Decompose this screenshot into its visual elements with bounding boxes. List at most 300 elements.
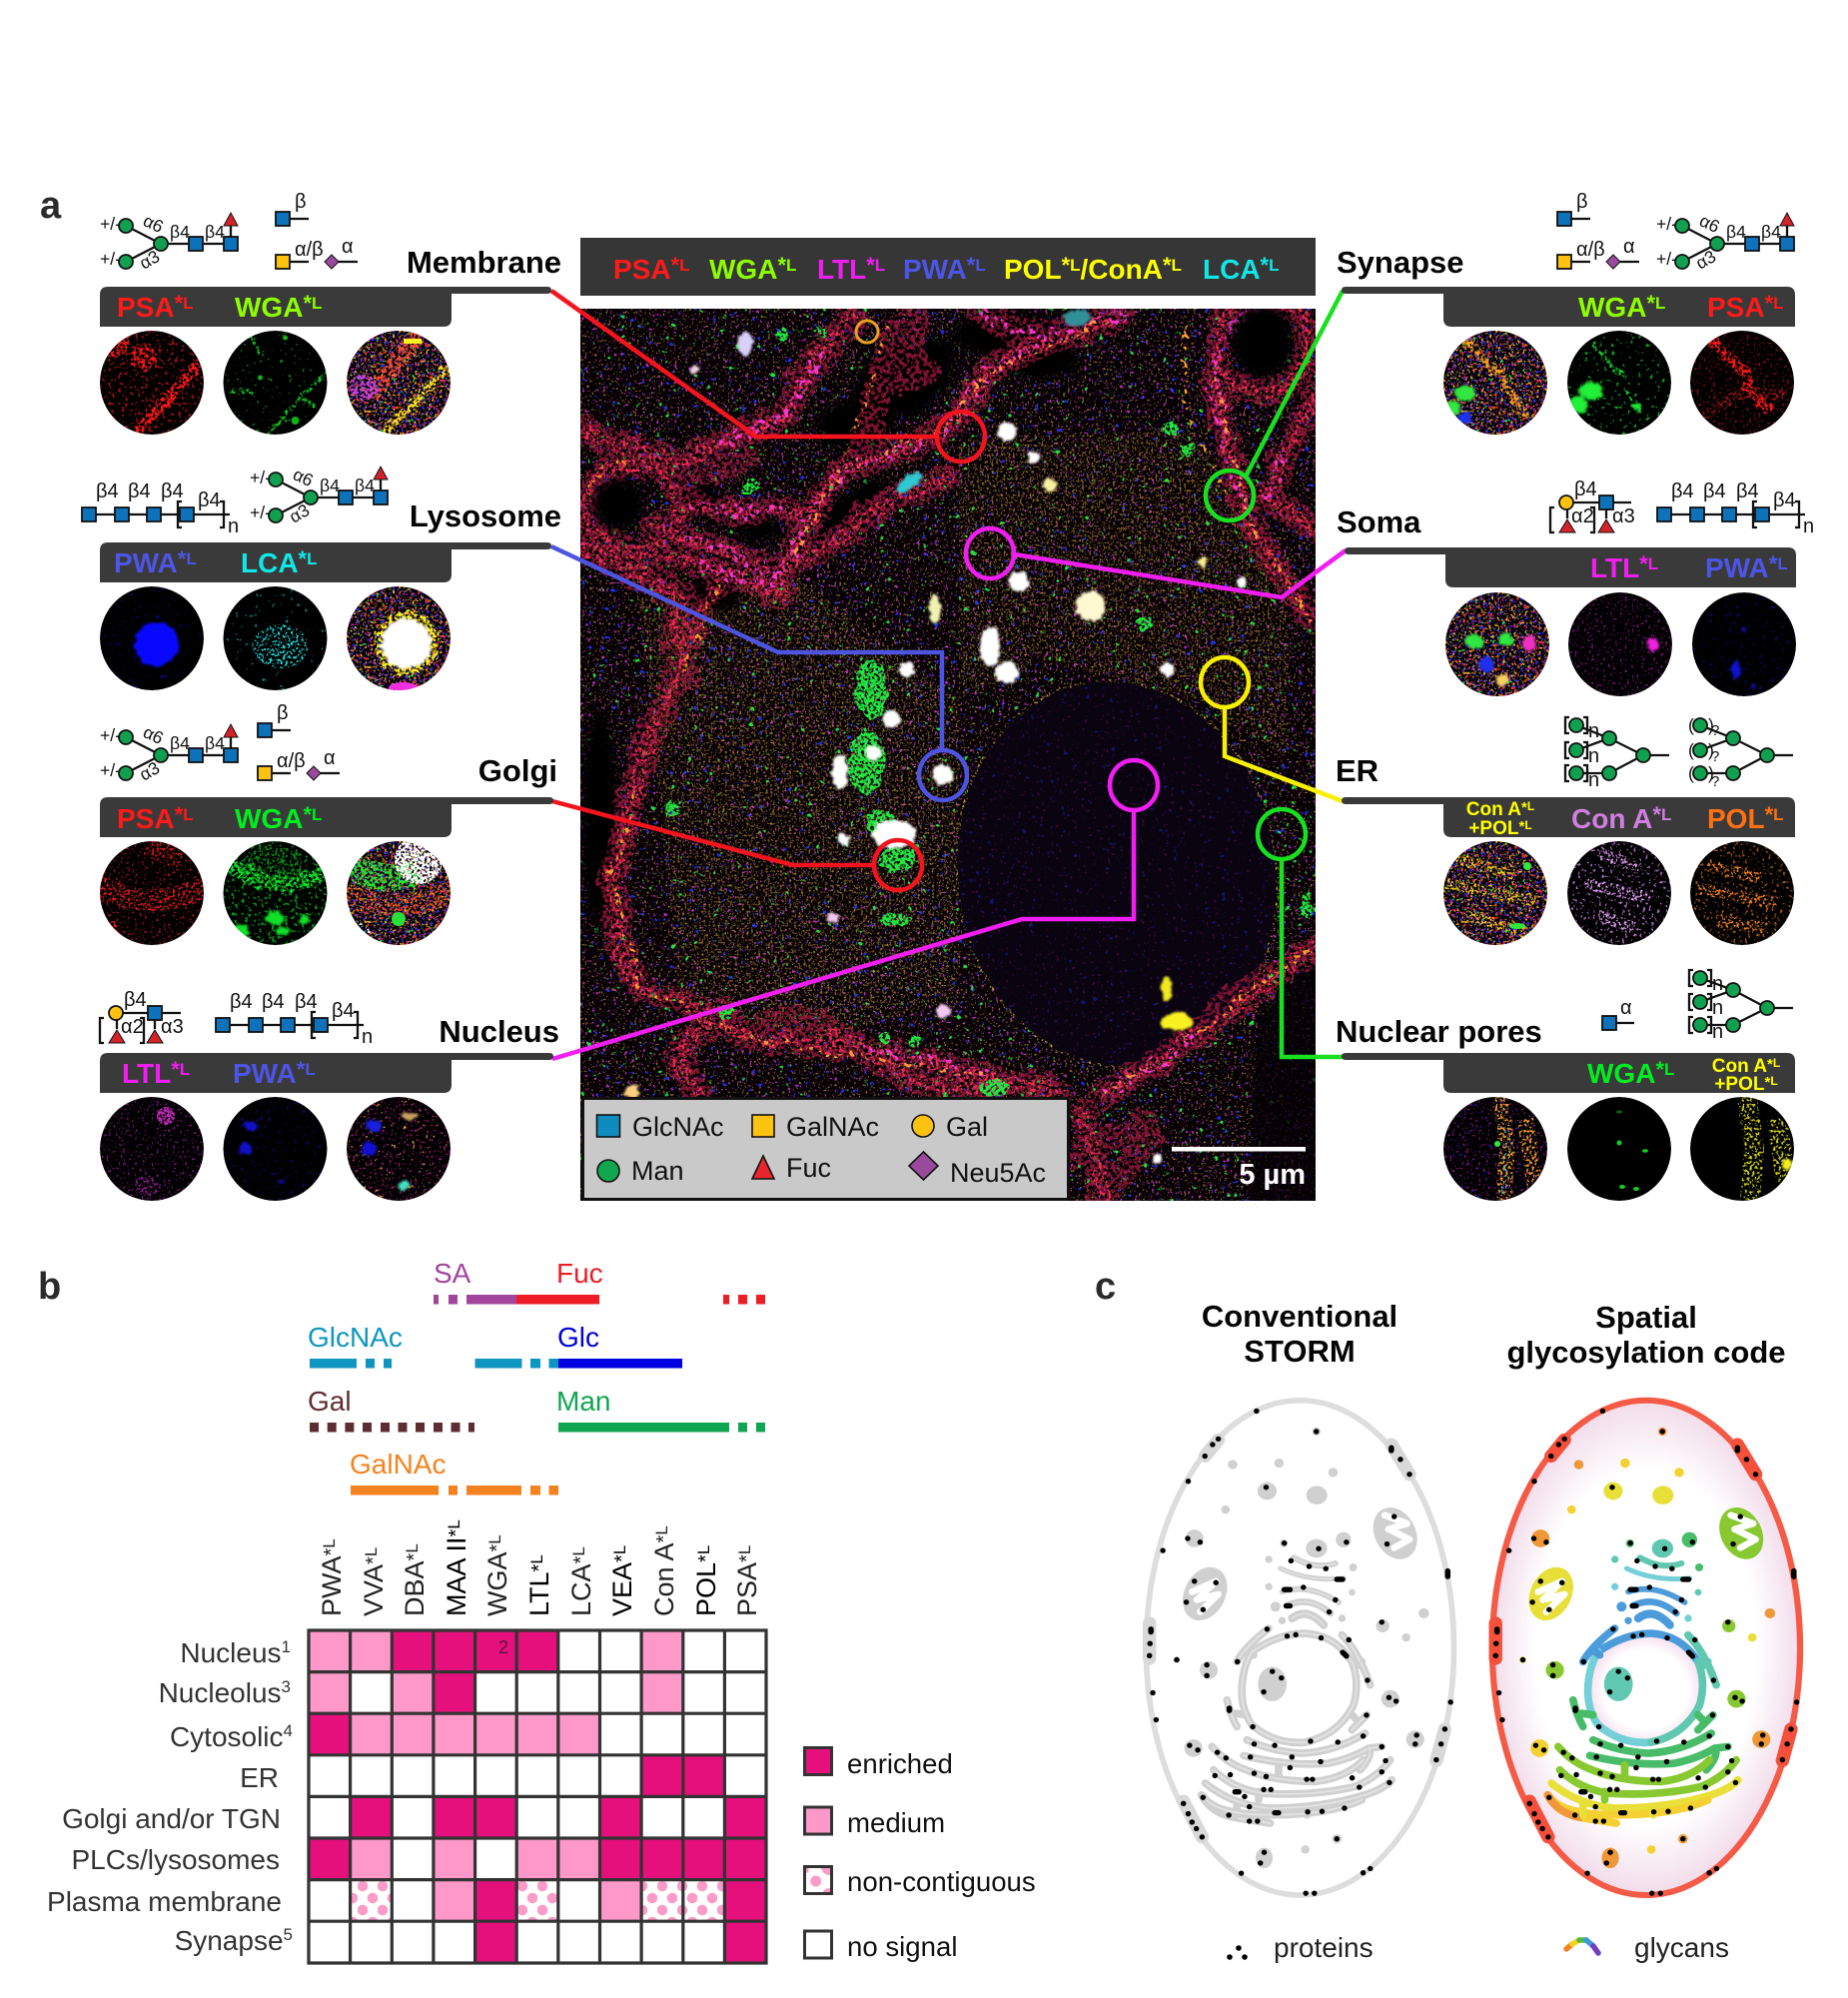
column headers: *: [653, 1534, 675, 1542]
row labels: Plasma membrane: [47, 1886, 282, 1917]
label banner: L: [183, 805, 194, 824]
channel title band: *: [1261, 253, 1270, 278]
column headers: *: [611, 1554, 633, 1562]
channel title band: PSA: [613, 254, 671, 285]
SA and Fuc: Fuc: [556, 1258, 603, 1289]
channel title band: *: [967, 253, 976, 278]
glycan: terminal residues: [1557, 191, 1639, 269]
column headers: *: [363, 1556, 385, 1564]
leader: ER: [1201, 657, 1343, 801]
channel title band: *: [671, 253, 680, 278]
label banner: L: [1655, 294, 1665, 313]
image: WGA: [224, 331, 330, 438]
column headers: *: [486, 1544, 508, 1552]
glycan: fucosylated: [1550, 479, 1635, 532]
label banner: *: [1765, 291, 1774, 316]
glycan: high mannose optional: ): [1708, 740, 1714, 760]
label banner: PWA: [1705, 552, 1769, 583]
glycan: polymer: n: [362, 1026, 373, 1048]
region: Membrane: [100, 191, 561, 439]
label banner: Con A: [1712, 1056, 1767, 1077]
glycan: branched: β4: [1761, 222, 1781, 242]
glycan: fucosylated: α2: [1571, 505, 1594, 527]
glycan: branched: β4: [170, 733, 190, 753]
dark lumen areas: [581, 313, 1079, 929]
Gal and Man: Gal: [308, 1386, 352, 1417]
label banner: WGA: [235, 803, 303, 834]
image: LTL: [100, 1097, 204, 1201]
channel title band: [580, 238, 1316, 296]
glycan: branched: α3: [286, 500, 313, 526]
image: WGA: [1567, 331, 1671, 435]
glycan symbol legend: Gal: [946, 1112, 988, 1142]
glycan: alpha GlcNAc: [1602, 997, 1634, 1030]
heat map: 2: [498, 1637, 508, 1657]
glycan: high mannose n: n: [1588, 769, 1599, 791]
region: Nucleus: [100, 989, 559, 1201]
image: PSA: [100, 331, 206, 439]
channel title band: L: [875, 256, 885, 275]
glycan: polymer: β4: [161, 481, 184, 502]
glycan: high mannose n: n: [1588, 745, 1599, 767]
image: PWA: [224, 1097, 328, 1201]
column headers: LCA: [566, 1563, 596, 1616]
column headers: L: [610, 1545, 629, 1554]
label banner: *: [303, 802, 312, 827]
glycan symbol legend: Neu5Ac: [950, 1158, 1046, 1188]
heat map legend: non-contiguous: [847, 1866, 1036, 1897]
row labels: Cytosolic: [170, 1721, 284, 1752]
glycan: fucosylated: β4: [124, 989, 147, 1011]
glycan: branched: β4: [320, 476, 340, 496]
glycan: high mannose optional: [1688, 715, 1793, 790]
column headers: L: [445, 1519, 463, 1529]
glycan: branched: β4: [355, 476, 375, 496]
label banner: *: [171, 1057, 180, 1082]
label banner: PSA: [117, 803, 175, 834]
row labels: ER: [240, 1762, 279, 1793]
glycan: branched: +/-: [250, 502, 271, 522]
label banner: *: [1521, 799, 1527, 816]
label banner: L: [1648, 554, 1658, 573]
GalNAc: GalNAc: [350, 1449, 446, 1480]
key: glycans: glycans: [1634, 1932, 1729, 1963]
row labels: Golgi and/or TGN: [62, 1803, 281, 1834]
column headers: *: [570, 1555, 592, 1563]
heading Soma: Soma: [1337, 504, 1421, 539]
column headers: L: [569, 1546, 588, 1556]
heading Lysosome: Lysosome: [410, 499, 561, 533]
glycan: fucosylated: [100, 989, 184, 1043]
column headers: [317, 1519, 762, 1616]
image: merge: [1445, 592, 1549, 696]
glycan: terminal residues: α/β: [277, 750, 306, 772]
column headers: PWA: [317, 1556, 347, 1616]
glycan: polymer: β4: [1736, 481, 1759, 502]
glycan: polymer: n: [1803, 515, 1814, 537]
channel title band: LCA: [1203, 254, 1261, 285]
channel title band: L: [786, 256, 796, 275]
glycan: terminal residues: α: [324, 747, 336, 769]
glycan: branched: β4: [205, 733, 225, 753]
glycan: branched: +/-: [1656, 249, 1677, 269]
title: Spatial glycosylation code: Spatial: [1595, 1300, 1697, 1335]
glycan: high mannose n: [1689, 970, 1793, 1043]
row labels: Nucleus: [180, 1637, 282, 1668]
label banner: PSA: [1707, 292, 1765, 323]
label banner: L: [180, 1060, 190, 1079]
region: Soma: [1337, 479, 1814, 696]
image: WGA: [1567, 1097, 1671, 1201]
main micrograph: [580, 297, 1316, 1201]
glycan: polymer: β4: [230, 991, 253, 1013]
heading Synapse: Synapse: [1337, 245, 1464, 280]
glycan structure: branched: +/-: [100, 249, 121, 269]
channel title band: *: [866, 253, 875, 278]
green puncta: [665, 328, 1312, 1095]
column headers: LTL: [524, 1571, 554, 1616]
column headers: MAA II: [442, 1536, 471, 1616]
SA and Fuc: [434, 1258, 765, 1305]
image: WGA: [224, 841, 328, 945]
label banner: L: [1777, 554, 1788, 573]
label banner: +POL: [1468, 818, 1518, 839]
label banner: *: [175, 291, 184, 316]
spatial glycosylation code cell: [1492, 1401, 1800, 1895]
glycan: high mannose optional: (: [1688, 715, 1694, 735]
glycan structure: branched: α6: [140, 210, 167, 237]
label banner: PSA: [117, 292, 175, 323]
leader: lysosome: [551, 546, 967, 800]
glycan: fucosylated: α3: [161, 1016, 184, 1038]
glycan: terminal residues: α: [1623, 236, 1635, 258]
glycan structure: terminal residues: α/β: [295, 239, 324, 261]
title: Spatial glycosylation code: glycosylation code: [1506, 1335, 1786, 1370]
region: Synapse: [1337, 191, 1795, 435]
glycan structure: branched: β4: [205, 222, 225, 242]
glycan structure: branched: [100, 210, 238, 273]
heat map legend: no signal: [847, 1931, 957, 1962]
column headers: L: [527, 1554, 546, 1564]
label banner: L: [1661, 805, 1671, 824]
glycan structure: branched: α3: [136, 246, 163, 273]
glycan symbol legend: Fuc: [786, 1153, 831, 1183]
label banner: *: [297, 1057, 306, 1082]
column headers: L: [652, 1525, 671, 1535]
row labels: 4: [284, 1721, 293, 1740]
label banner: L: [1770, 1074, 1778, 1088]
leader: soma: [966, 528, 1346, 597]
column headers: L: [403, 1543, 422, 1553]
title: Conventional STORM: STORM: [1244, 1334, 1356, 1369]
glycan: terminal residues: β: [277, 702, 289, 724]
glycan: branched: +/-: [100, 760, 121, 780]
label banner: *: [1764, 1074, 1770, 1091]
glycan: branched: α6: [140, 721, 167, 748]
membrane network: [580, 297, 1316, 1199]
panel c: cell schematics: [1095, 1266, 1800, 1963]
glycan: polymer: β4: [295, 991, 318, 1013]
label banner: [100, 797, 553, 837]
heading Nucleus: Nucleus: [439, 1014, 559, 1049]
panel letter b: b: [38, 1266, 61, 1308]
heading Nuclear pores: Nuclear pores: [1336, 1014, 1542, 1049]
glycan: fucosylated: α3: [1612, 505, 1635, 527]
label banner: *: [1518, 818, 1524, 835]
image: merge: [1443, 1097, 1547, 1201]
label banner: Con A: [1466, 799, 1521, 820]
row labels: Synapse: [175, 1925, 284, 1956]
image: Con A: [1567, 841, 1671, 945]
heading ER: ER: [1336, 753, 1379, 788]
image: PSA: [1690, 331, 1794, 435]
glycan: high mannose n: n: [1712, 1021, 1723, 1043]
column headers: *: [528, 1563, 550, 1571]
label banner: L: [1524, 818, 1532, 832]
channel title band: *: [1163, 253, 1172, 278]
image: PSA: [93, 841, 207, 949]
leader lines and ROI rings: [551, 291, 1346, 1059]
channel title band: L: [1070, 256, 1081, 275]
glycan: polymer: β4: [262, 991, 285, 1013]
glycan symbol legend: GlcNAc: [632, 1112, 724, 1142]
glycan: high mannose optional: (: [1688, 763, 1694, 783]
glycan: polymer: [216, 991, 373, 1048]
column headers: L: [320, 1538, 339, 1548]
Gal and Man: [308, 1386, 765, 1433]
label banner: [100, 287, 551, 327]
label banner: Con A: [1571, 803, 1652, 834]
row labels: 1: [282, 1637, 291, 1656]
region: Golgi: [93, 702, 557, 956]
glycan structure: branched: +/-: [100, 214, 121, 234]
glycan: polymer: β4: [128, 481, 151, 502]
channel title band: /ConA: [1081, 254, 1163, 285]
column headers: DBA: [400, 1560, 430, 1616]
image: PWA: [100, 586, 204, 690]
label banner: PWA: [114, 547, 178, 578]
nucleus region: [955, 679, 1279, 1069]
label banner: *: [1769, 551, 1778, 576]
row labels: 5: [284, 1925, 293, 1944]
label banner: L: [312, 294, 322, 313]
label banner: WGA: [1578, 292, 1646, 323]
channel title band: PWA: [903, 254, 967, 285]
channel title band: L: [1172, 256, 1182, 275]
channel title band: *: [777, 253, 786, 278]
glycan: branched: α3: [1692, 246, 1719, 273]
glycan: high mannose n: n: [1712, 997, 1723, 1019]
ring around small vessel: [856, 321, 878, 343]
key: proteins: [1227, 1932, 1374, 1963]
glycan structure: terminal residues: α: [342, 236, 354, 258]
label banner: *: [175, 802, 184, 827]
label banner: L: [1527, 799, 1534, 813]
GalNAc: [350, 1449, 558, 1495]
label banner: [1345, 547, 1796, 587]
column headers: VEA: [607, 1562, 637, 1616]
image: LCA: [224, 586, 328, 690]
glycan: polymer: β4: [1773, 490, 1796, 511]
channel title band: LTL: [817, 254, 866, 285]
glycan: branched: β4: [1726, 222, 1746, 242]
image: merge: [1443, 331, 1547, 435]
column headers: Con A: [649, 1542, 679, 1616]
label banner: [1342, 797, 1795, 839]
column headers: WGA: [482, 1552, 512, 1616]
title: Conventional STORM: [1202, 1299, 1397, 1369]
label banner: L: [1773, 294, 1784, 313]
glycan structure: branched: β4: [170, 222, 190, 242]
leader: Golgi: [552, 801, 922, 890]
region: Nuclear pores: [1336, 970, 1795, 1201]
glycan: fucosylated: α2: [121, 1016, 144, 1038]
glycan: polymer: β4: [332, 1000, 355, 1022]
leader: synapse: [1206, 291, 1343, 520]
glycan: high mannose optional: ?: [1711, 748, 1719, 765]
glycan: branched: α6: [290, 464, 317, 491]
glycan: polymer: β4: [1671, 481, 1694, 502]
glycan: polymer: β4: [1703, 481, 1726, 502]
glycan: alpha GlcNAc: α: [1620, 997, 1632, 1019]
label banner: LTL: [122, 1058, 171, 1089]
label banner: *: [178, 546, 187, 571]
glycan: high mannose optional: ): [1708, 715, 1714, 735]
glycan symbol legend: [583, 1099, 1069, 1199]
leader: membrane: [551, 291, 985, 462]
label banner: L: [183, 294, 194, 313]
glycan symbol legend: GalNAc: [786, 1112, 879, 1142]
glycan: branched: [1656, 210, 1794, 273]
bright puncta: [625, 310, 1247, 1164]
glycan: branched: α3: [136, 757, 163, 784]
channel title band: WGA: [709, 254, 777, 285]
column headers: L: [735, 1545, 754, 1554]
region: Lysosome: [82, 464, 561, 694]
glycan: high mannose optional: ): [1708, 763, 1714, 783]
label banner: LTL: [1590, 552, 1639, 583]
glycan: polymer: n: [228, 515, 239, 537]
label banner: L: [1664, 1060, 1674, 1079]
title: Conventional STORM: Conventional: [1202, 1299, 1397, 1334]
glycan: terminal residues: β: [1576, 191, 1588, 213]
Gal and Man: Man: [556, 1386, 610, 1417]
row labels: PLCs/lysosomes: [71, 1844, 280, 1875]
glycan: high mannose n: n: [1588, 720, 1599, 742]
glycan: branched: +/-: [100, 725, 121, 745]
column headers: *: [736, 1554, 758, 1562]
column headers: *: [404, 1552, 426, 1560]
image: merge: [336, 836, 454, 956]
glycan: polymer: [82, 481, 239, 537]
channel title band: L: [1269, 256, 1279, 275]
label banner: *: [303, 291, 312, 316]
column headers: L: [362, 1547, 381, 1556]
label banner: [1342, 1053, 1795, 1095]
glycan: polymer: [1657, 481, 1814, 537]
row labels: [47, 1637, 293, 1956]
column headers: *: [695, 1554, 717, 1562]
label banner: +POL: [1714, 1074, 1764, 1095]
image: LTL: [1568, 592, 1672, 696]
GlcNAc and Glc: [308, 1322, 682, 1369]
label banner: L: [1773, 1056, 1780, 1070]
region: ER: [1336, 715, 1795, 945]
image: merge: [1443, 841, 1547, 945]
glycan: high mannose optional: ?: [1711, 722, 1719, 739]
sugar specificity bars: [308, 1258, 765, 1495]
glycan: branched: α6: [1696, 210, 1723, 237]
image: Con A + POL: [1690, 1097, 1794, 1201]
glycan: high mannose n: [1565, 717, 1669, 791]
glycan: high mannose optional: (: [1688, 740, 1694, 760]
label banner: [1342, 287, 1795, 327]
heading Golgi: Golgi: [478, 753, 557, 788]
label banner: *: [1646, 291, 1655, 316]
glycan structure: terminal residues: β: [295, 191, 307, 213]
row labels: 3: [282, 1677, 291, 1696]
GlcNAc and Glc: Glc: [557, 1322, 599, 1353]
column headers: POL: [691, 1562, 721, 1616]
glycan: polymer: β4: [198, 490, 221, 511]
column headers: PSA: [732, 1562, 762, 1616]
glycan: branched: [100, 721, 238, 784]
label banner: *: [1765, 802, 1774, 827]
label banner: LCA: [241, 547, 299, 578]
image: PWA: [1692, 592, 1796, 696]
leader: nucleus: [552, 760, 1158, 1059]
panel b: lectin specificity table: [38, 1258, 1036, 1963]
leader: nuclear pores: [1258, 809, 1343, 1057]
glycan: branched: +/-: [250, 468, 271, 488]
channel title band: POL: [1004, 254, 1062, 285]
glycan: branched: [250, 464, 388, 526]
column headers: VVA: [359, 1564, 389, 1616]
channel title band: L: [975, 256, 986, 275]
panel letter a: a: [40, 185, 62, 227]
key: glycans: [1566, 1932, 1729, 1963]
key: proteins: proteins: [1274, 1932, 1374, 1963]
column headers: *: [446, 1528, 467, 1536]
dark holes: [593, 306, 1293, 529]
column headers: *: [321, 1548, 343, 1556]
image: merge: [347, 586, 451, 694]
SA and Fuc: SA: [434, 1258, 471, 1289]
heat map: [309, 1630, 766, 1963]
GlcNAc and Glc: GlcNAc: [308, 1322, 403, 1353]
label banner: *: [299, 546, 308, 571]
panel a: glycan micrographs: [40, 185, 1814, 1201]
label banner: *: [1767, 1056, 1773, 1073]
heat map legend: medium: [847, 1807, 945, 1838]
label banner: L: [1773, 805, 1784, 824]
column headers: L: [485, 1534, 504, 1544]
conventional STORM cell: [1146, 1401, 1454, 1895]
channel title band: L: [679, 256, 690, 275]
channel title band: *: [1062, 253, 1071, 278]
label banner: WGA: [235, 292, 303, 323]
label banner: PWA: [233, 1058, 297, 1089]
label banner: L: [312, 805, 322, 824]
label banner: L: [186, 549, 197, 568]
glycan: polymer: β4: [96, 481, 119, 502]
label banner: L: [307, 549, 318, 568]
label banner: *: [1639, 551, 1648, 576]
scale bar: [1172, 1147, 1306, 1191]
image: merge: [347, 1097, 451, 1201]
glycan structure: terminal residues: [276, 191, 358, 269]
row labels: Nucleolus: [159, 1677, 282, 1708]
